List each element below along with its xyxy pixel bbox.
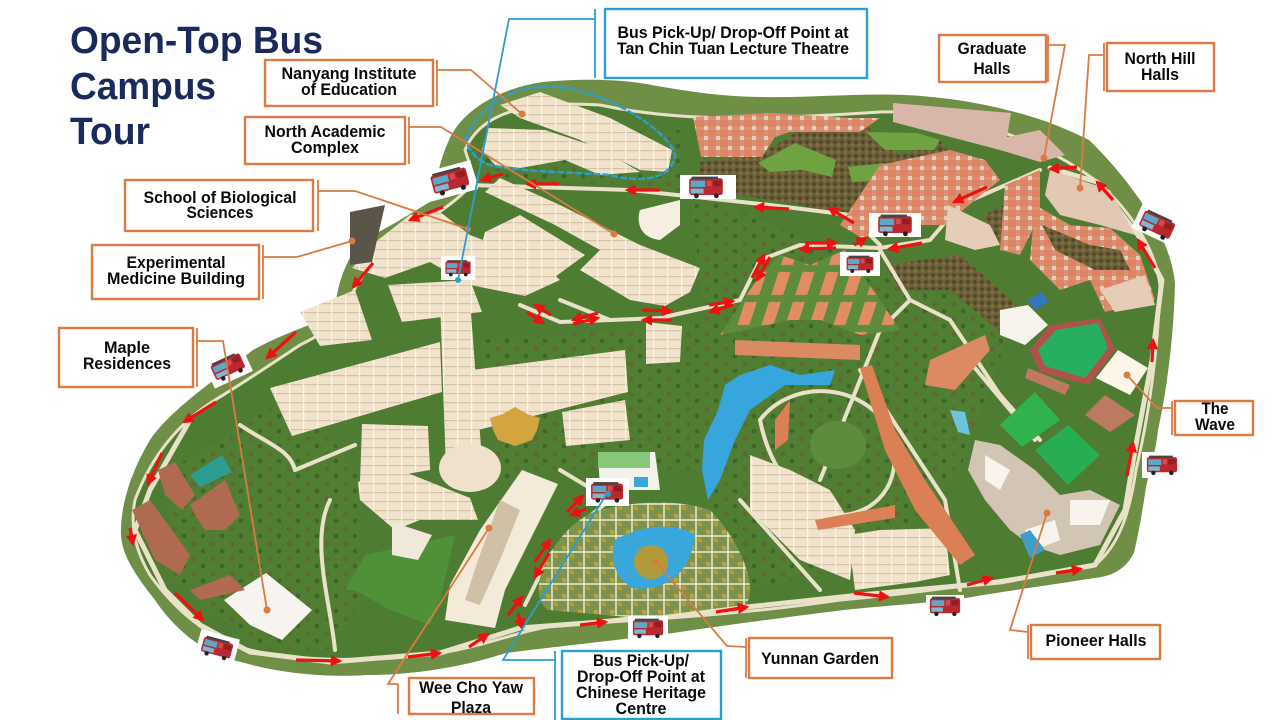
water: pioneer pond xyxy=(1020,530,1045,558)
arrow xyxy=(130,528,133,544)
residences: mid south strips xyxy=(720,250,900,335)
callout: North Academic Complex: North Academic xyxy=(264,123,386,141)
residences: central cluster xyxy=(840,150,1000,240)
callout: Graduate Halls: Halls xyxy=(974,60,1010,78)
arrow xyxy=(410,207,443,220)
arrow xyxy=(408,653,440,657)
building: plaza courtyard strip xyxy=(465,500,520,605)
water: yunnan stream xyxy=(702,365,835,500)
bus icons xyxy=(194,160,1182,667)
callout: Nanyang Institute of Education xyxy=(265,60,526,118)
garden: yunnan garden xyxy=(539,502,750,618)
arrow xyxy=(854,238,866,245)
residences: curve terrace xyxy=(1030,205,1155,312)
arrow xyxy=(1097,182,1113,200)
road: hill ring xyxy=(760,391,894,515)
callout: Bus Pick-Up at Chinese Heritage Centre: Bus Pick-Up/ xyxy=(593,652,689,670)
campus roads xyxy=(135,168,1162,662)
sports: running track xyxy=(1030,318,1115,385)
building: golden learning hub xyxy=(490,407,540,446)
arrow xyxy=(353,263,373,287)
callout: Experimental Medicine Building: Medicine Building xyxy=(107,270,245,288)
callout: The Wave xyxy=(1124,372,1253,435)
arrow xyxy=(757,257,770,280)
title: Tour xyxy=(70,111,150,153)
arrow xyxy=(752,255,764,278)
residences: long terrace xyxy=(735,335,990,390)
callout: Nanyang Institute of Education: of Education xyxy=(301,81,397,99)
callout: Pioneer Halls xyxy=(1010,510,1160,659)
icon: bus xyxy=(586,478,629,506)
callout: Graduate Halls: Graduate xyxy=(958,40,1026,58)
building: lecture hub rotunda xyxy=(439,444,501,492)
callout: Maple Residences: Maple xyxy=(104,339,150,357)
callout: Bus Pick-Up at Chinese Heritage Centre: Drop-Off Point at xyxy=(577,668,705,686)
arrow xyxy=(148,453,162,484)
building: semicircle block xyxy=(639,200,680,240)
arrow xyxy=(184,402,216,422)
title: Open-Top Bus xyxy=(70,20,323,62)
residences: north hill towers xyxy=(1045,170,1135,235)
campus map model xyxy=(121,80,1175,676)
arrow xyxy=(535,305,551,315)
callout: Wee Cho Yaw Plaza: Wee Cho Yaw xyxy=(419,679,523,697)
callout: Wee Cho Yaw Plaza xyxy=(388,524,534,717)
arrow xyxy=(175,593,203,620)
lawn: bright hill xyxy=(345,535,455,625)
callout: Wee Cho Yaw Plaza: Plaza xyxy=(451,699,492,717)
arrow xyxy=(527,182,559,186)
building: wee cho yaw plaza xyxy=(445,470,558,628)
callout: The Wave: Wave xyxy=(1195,416,1235,434)
icon: bus xyxy=(203,345,253,389)
arrow xyxy=(889,243,922,249)
sports: field two xyxy=(1035,425,1100,485)
arrow xyxy=(267,332,296,358)
arrow xyxy=(642,310,671,311)
callout: Graduate Halls xyxy=(939,35,1065,162)
lawn clearings xyxy=(758,132,940,182)
arrow xyxy=(580,622,606,625)
title: Campus xyxy=(70,66,216,108)
icon: bus xyxy=(194,629,240,667)
building: heritage green roof xyxy=(598,452,650,468)
callout: Nanyang Institute of Education: Nanyang Institute xyxy=(282,65,416,83)
icon: bus xyxy=(1132,204,1182,246)
callout: Experimental Medicine Building xyxy=(92,238,356,299)
residences: north orange halls xyxy=(693,113,880,157)
residences: towers top xyxy=(893,103,1065,162)
callout: Maple Residences xyxy=(59,328,270,614)
forest: inside curve xyxy=(1042,225,1130,270)
building: courtyard block xyxy=(392,522,432,560)
hill: inner oval lawn xyxy=(810,421,866,469)
building: chinese heritage centre xyxy=(598,452,660,490)
blue dashed zone: north academic complex xyxy=(465,87,675,179)
arrow xyxy=(296,660,340,661)
building: dark experimental medicine xyxy=(350,205,385,265)
arrow xyxy=(710,305,733,312)
arrow xyxy=(1152,340,1153,362)
callout: Bus Pick-Up at Tan Chin Tuan Lecture Theatre: Tan Chin Tuan Lecture Theatre xyxy=(617,40,849,58)
callout: Pioneer Halls: Pioneer Halls xyxy=(1046,632,1146,650)
icon: bus xyxy=(1142,452,1180,478)
arrow xyxy=(535,553,549,577)
arrow xyxy=(627,188,660,192)
icon: bus xyxy=(869,213,921,237)
tree cover xyxy=(170,130,1010,650)
arrow xyxy=(571,509,586,515)
arrow xyxy=(1127,443,1133,476)
callout: Bus Pick-Up at Chinese Heritage Centre xyxy=(503,491,721,720)
water: pond xyxy=(950,410,970,435)
callout: Yunnan Garden xyxy=(652,558,892,678)
forest belt xyxy=(700,120,965,225)
arrow xyxy=(567,496,583,512)
icon: bus xyxy=(840,252,880,276)
water: pool xyxy=(634,477,648,487)
callout: North Academic Complex: Complex xyxy=(291,139,360,157)
callout: Maple Residences: Residences xyxy=(83,355,171,373)
callout: Bus Pick-Up at Tan Chin Tuan Lecture Theatre xyxy=(455,9,867,283)
inner grounds xyxy=(133,104,1160,659)
sports: field one xyxy=(1000,392,1060,447)
land outline xyxy=(121,80,1175,676)
residences: north hill column xyxy=(1000,170,1040,255)
callout: School of Biological Sciences xyxy=(125,180,471,232)
water: garden pond xyxy=(613,527,695,589)
arrow xyxy=(1056,569,1081,573)
arrow xyxy=(643,318,672,322)
garden: central circle xyxy=(634,545,668,579)
building: sports block xyxy=(1000,305,1048,345)
callout: North Academic Complex xyxy=(245,117,618,238)
callout: North Hill Halls xyxy=(1076,43,1214,192)
arrow xyxy=(755,207,789,209)
arrow xyxy=(482,174,503,180)
callout: Bus Pick-Up at Chinese Heritage Centre: Centre xyxy=(616,700,666,718)
arrow xyxy=(805,241,836,245)
arrow xyxy=(954,187,987,202)
sports: courts xyxy=(1025,368,1135,432)
icon: bus xyxy=(680,175,736,199)
residences: pioneer halls xyxy=(968,440,1120,555)
arrow xyxy=(508,597,522,615)
icon: bus xyxy=(628,616,668,640)
residences: tower blocks xyxy=(945,205,1155,312)
arrow xyxy=(709,301,733,305)
buildings: campus academic blocks xyxy=(270,92,950,590)
callout: Experimental Medicine Building: Experimental xyxy=(126,254,226,272)
icon: bus xyxy=(422,160,478,202)
building: sports hall maple xyxy=(224,573,312,640)
residences: slim orange blocks xyxy=(775,365,975,565)
arrow xyxy=(535,540,550,562)
callout: School of Biological Sciences: School of Biological xyxy=(144,189,296,207)
residences: pioneer white wings xyxy=(985,455,1110,550)
title xyxy=(70,20,323,153)
forest patches xyxy=(885,195,1030,340)
callout: The Wave: The xyxy=(1202,400,1228,418)
arrow xyxy=(716,607,747,612)
arrow xyxy=(1138,240,1155,268)
arrow xyxy=(829,208,854,223)
callout: North Hill Halls: North Hill xyxy=(1124,50,1196,68)
icon: bus xyxy=(441,256,475,280)
callout: North Hill Halls: Halls xyxy=(1141,66,1179,84)
callout: Bus Pick-Up at Chinese Heritage Centre: Chinese Heritage xyxy=(576,684,706,702)
arrow xyxy=(573,318,598,324)
callout: School of Biological Sciences: Sciences xyxy=(186,204,254,222)
arrow xyxy=(518,613,522,628)
icon: bus xyxy=(926,595,964,617)
sports: pool xyxy=(1028,292,1048,310)
callout: Bus Pick-Up at Tan Chin Tuan Lecture Theatre: Bus Pick-Up/ Drop-Off Point at xyxy=(618,24,849,42)
sports: track field xyxy=(1038,323,1108,378)
residences: maple red brick xyxy=(132,462,245,600)
arrow xyxy=(469,634,488,647)
route arrows xyxy=(130,167,1155,661)
callout: Yunnan Garden: Yunnan Garden xyxy=(761,650,879,668)
arrow xyxy=(854,593,888,597)
arrow xyxy=(967,578,992,585)
arrow xyxy=(573,313,598,320)
arrow xyxy=(800,248,836,249)
court: tennis xyxy=(190,455,232,487)
arrow xyxy=(527,312,543,323)
arrow xyxy=(1050,167,1077,169)
building: the wave xyxy=(1096,350,1148,395)
